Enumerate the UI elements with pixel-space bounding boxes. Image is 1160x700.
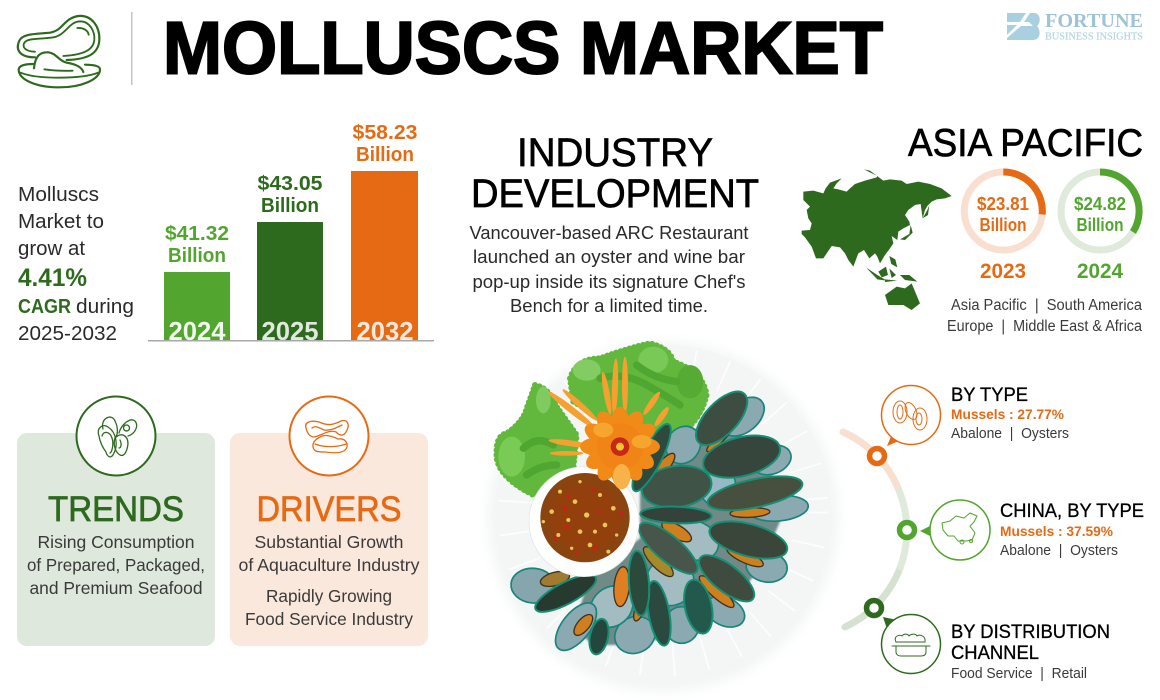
icon: oyster on a shell [18, 16, 100, 87]
description: launched an oyster and wine bar [473, 247, 745, 267]
growth statement: Molluscs [18, 183, 99, 206]
icon: oyster [290, 396, 368, 476]
growth statement: 2025-2032 [18, 322, 117, 345]
bar 2032: 2032 [356, 316, 414, 346]
segment: by distribution channel [866, 600, 1110, 682]
closed shells [531, 383, 805, 656]
heading: CHINA, BY TYPE [1000, 500, 1144, 522]
description: Vancouver-based ARC Restaurant [470, 223, 748, 243]
heading: DRIVERS [256, 490, 402, 529]
heading [471, 131, 759, 216]
description: Bench for a limited time. [510, 296, 708, 316]
donut 2024: 2024 [1077, 259, 1123, 283]
icon: China map in bubble [920, 500, 990, 560]
map: Asia Pacific [802, 169, 952, 310]
heading: TRENDS [48, 490, 184, 529]
heading [951, 621, 1110, 664]
description [238, 532, 420, 629]
heading: INDUSTRY [517, 131, 713, 175]
growth statement: during [76, 295, 134, 318]
description: Rapidly Growing [266, 586, 392, 606]
heading: ASIA PACIFIC [908, 122, 1143, 165]
growth statement: CAGR [18, 295, 71, 318]
bar 2025: $43.05 [258, 172, 322, 195]
bar chart [148, 121, 434, 346]
bar 2024: 2024 [168, 316, 226, 346]
bar 2024: Billion [168, 244, 226, 267]
panel: Asia Pacific [802, 122, 1143, 335]
timeline node [900, 522, 914, 538]
share: Mussels : 37.59% [1000, 523, 1114, 539]
segment: China, by type [900, 500, 1144, 560]
donut 2023 [964, 172, 1042, 283]
donut 2024 [1061, 172, 1139, 283]
region list: Europe | Middle East & Africa [947, 318, 1142, 335]
growth statement [18, 183, 134, 345]
heading: BY DISTRIBUTION [951, 621, 1110, 643]
bar 2025 [257, 172, 323, 346]
segment: by type [870, 384, 1069, 464]
donut 2024: $24.82 [1074, 193, 1126, 214]
lettuce [496, 343, 707, 495]
bar 2024: $41.32 [165, 222, 229, 245]
bar 2032 [351, 121, 418, 346]
description [470, 223, 748, 316]
donut 2023: Billion [980, 214, 1026, 235]
divider [131, 12, 132, 85]
mussels [510, 383, 809, 660]
timeline arc [843, 432, 907, 627]
industry development [470, 131, 759, 316]
growth statement: grow at [18, 237, 85, 260]
description: pop-up inside its signature Chef's [472, 272, 746, 292]
region list: Asia Pacific | South America [951, 297, 1142, 314]
shadow mass under mussels [573, 428, 780, 645]
sub-segments: Abalone | Oysters [951, 426, 1069, 442]
header [18, 6, 1143, 90]
donut 2023: 2023 [980, 259, 1026, 283]
sauce bowl [529, 467, 639, 577]
carved carrot flower [546, 357, 671, 489]
logo: Fortune Business Insights [1007, 10, 1143, 42]
bar 2024 [164, 222, 230, 346]
axis line [148, 340, 434, 342]
logo: Fortune Business Insights: FORTUNE [1045, 10, 1143, 32]
description: of Aquaculture Industry [238, 555, 420, 575]
panel: drivers [230, 396, 428, 646]
sub-segments: Food Service | Retail [951, 666, 1087, 682]
heading: CHANNEL [951, 642, 1039, 664]
description [27, 532, 205, 598]
bar 2025: Billion [261, 194, 319, 217]
donut 2023: $23.81 [977, 193, 1029, 214]
description: Rising Consumption [38, 532, 194, 552]
description: Food Service Industry [245, 609, 413, 629]
timeline node [870, 448, 884, 464]
icon: dish in bubble [882, 614, 940, 674]
panel: trends [17, 396, 215, 646]
description: and Premium Seafood [30, 578, 202, 598]
title: MOLLUSCS MARKET [163, 6, 883, 90]
open shells [510, 389, 809, 660]
sub-segments: Abalone | Oysters [1000, 543, 1118, 559]
plate [488, 342, 838, 692]
donut 2024: Billion [1076, 214, 1124, 235]
logo: Fortune Business Insights: BUSINESS INSIGHTS [1045, 30, 1143, 42]
region list [947, 297, 1142, 335]
growth statement: 4.41% [18, 264, 87, 292]
bar 2032: Billion [356, 143, 414, 166]
mussel meat [539, 423, 770, 639]
share: Mussels : 27.77% [951, 406, 1065, 422]
description: of Prepared, Packaged, [27, 555, 205, 575]
icon: mussels in bubble [882, 386, 940, 446]
description: Substantial Growth [254, 532, 404, 552]
bar 2032: $58.23 [352, 121, 418, 144]
photo: mussels on a plate [488, 342, 838, 692]
growth statement: Market to [18, 210, 104, 233]
icon: mussels [76, 396, 156, 476]
bar 2025: 2025 [262, 316, 318, 346]
heading: DEVELOPMENT [471, 172, 759, 216]
heading: BY TYPE [951, 384, 1028, 406]
timeline node [866, 600, 882, 616]
